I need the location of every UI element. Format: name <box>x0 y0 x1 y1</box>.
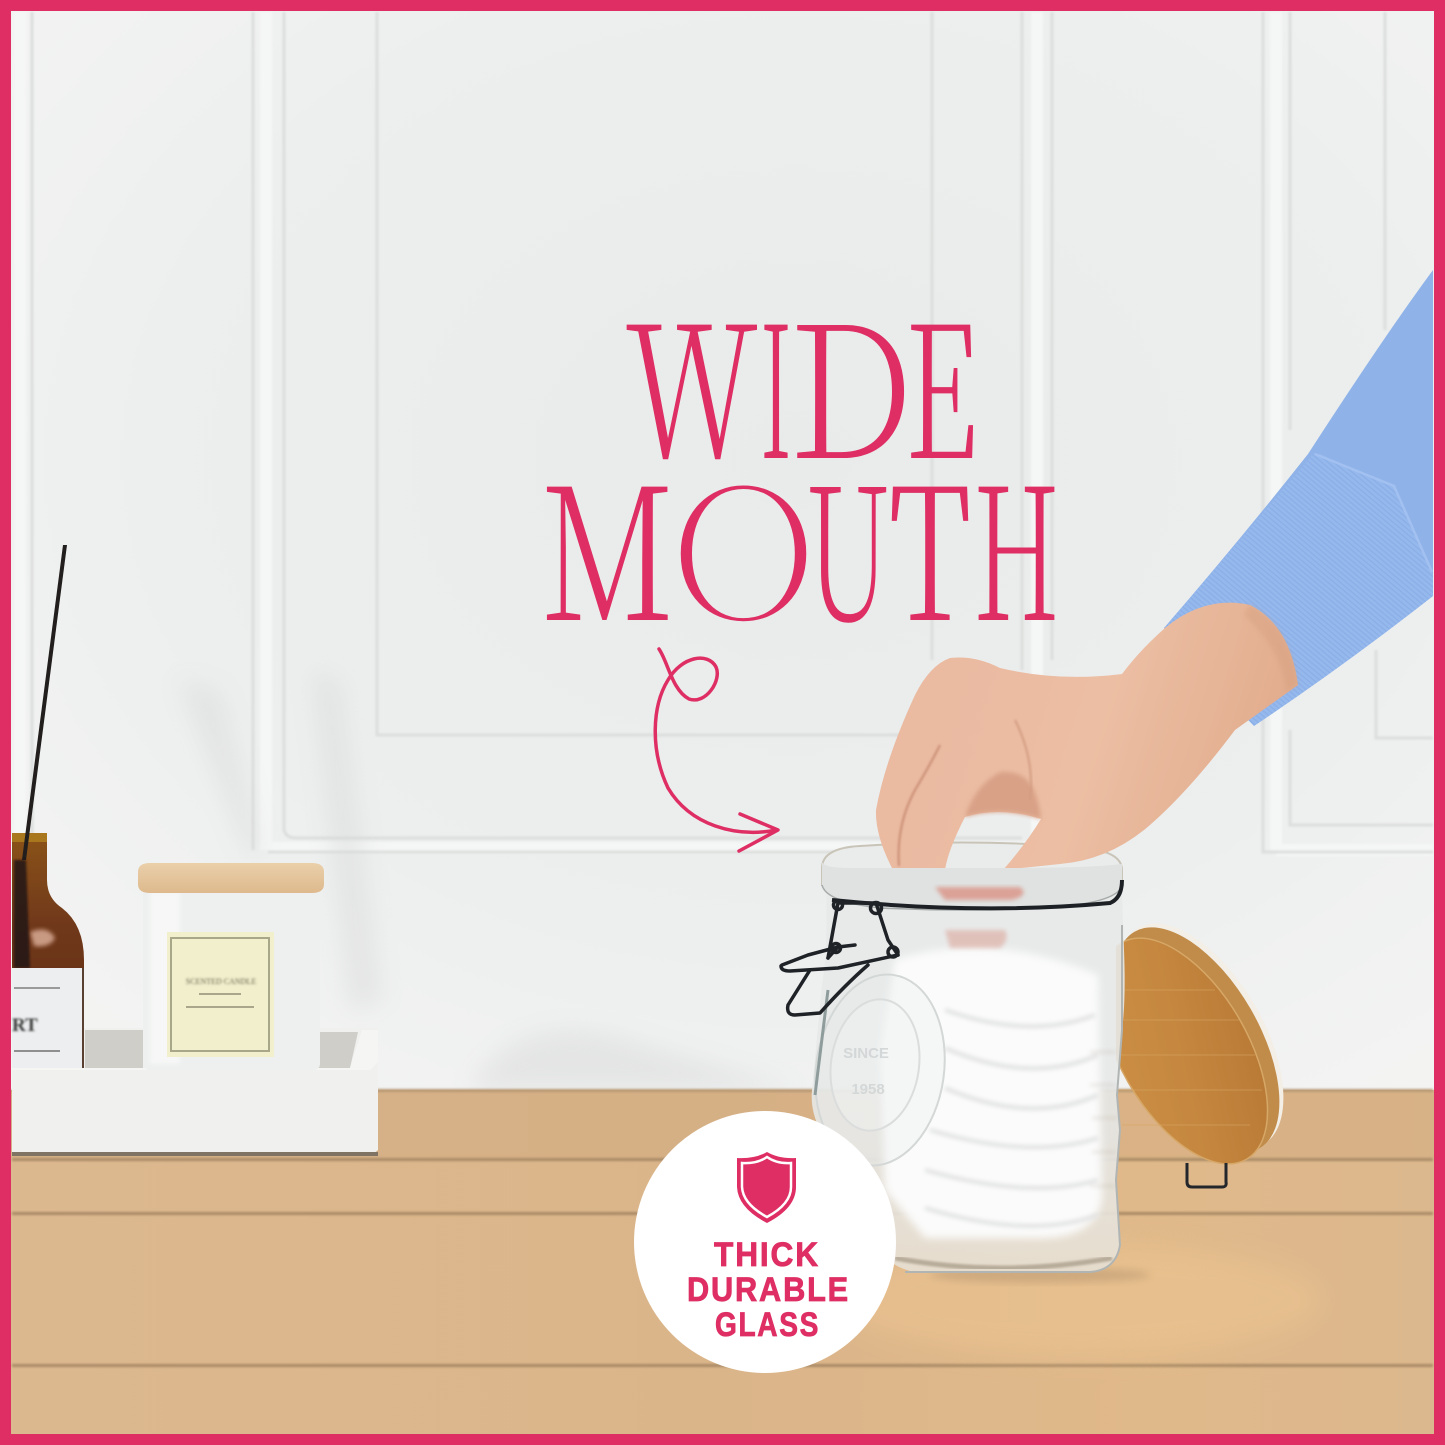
candle <box>138 863 324 1070</box>
sleeve: blue sweater arm <box>1164 270 1433 726</box>
table top <box>0 1089 1445 1445</box>
title: wide mouth: D <box>788 246 914 511</box>
reed diffuser bottle: RT <box>12 1015 38 1036</box>
embossed medallion <box>803 966 957 1174</box>
title: wide mouth: O <box>667 408 820 673</box>
title: wide mouth: M <box>541 408 675 673</box>
title: wide mouth: U <box>805 408 891 673</box>
hand <box>876 603 1298 870</box>
icon: shield <box>737 1152 796 1223</box>
glass edges <box>815 925 1122 1272</box>
bamboo lid <box>1116 924 1284 1165</box>
tray <box>12 1028 378 1156</box>
glass right strip reflections <box>1090 1052 1118 1186</box>
jar front rim <box>822 862 1122 910</box>
title: wide mouth: H <box>973 408 1060 673</box>
badge: thick durable glass: DURABLE <box>687 1271 850 1309</box>
arrow: curly pointing to jar <box>655 649 778 851</box>
embossed medallion: 1958 <box>851 1081 885 1098</box>
badge: thick durable glass <box>634 1111 896 1373</box>
badge: thick durable glass: THICK <box>714 1236 820 1274</box>
title: wide mouth: W <box>625 246 758 511</box>
wire clasp <box>781 900 898 1015</box>
lid shadow on table <box>930 1267 1150 1283</box>
title: wide mouth: I <box>760 246 792 511</box>
glass jar body <box>803 890 1125 1272</box>
wall background <box>0 0 1445 1095</box>
lid latch loop <box>1187 1163 1226 1187</box>
title: wide mouth: E <box>905 246 978 511</box>
wall panel mouldings <box>20 12 1433 852</box>
embossed medallion: SINCE <box>843 1045 889 1062</box>
title: wide mouth: T <box>889 408 971 673</box>
reed diffuser bottle <box>12 545 84 1068</box>
glass jar back rim <box>822 842 1122 885</box>
candle: SCENTED CANDLE <box>186 977 256 986</box>
title: wide mouth <box>541 246 1060 673</box>
badge: thick durable glass: GLASS <box>715 1306 820 1344</box>
cotton pads <box>880 948 1118 1238</box>
wall shadows <box>178 670 800 1090</box>
finger reflection <box>945 930 1007 948</box>
